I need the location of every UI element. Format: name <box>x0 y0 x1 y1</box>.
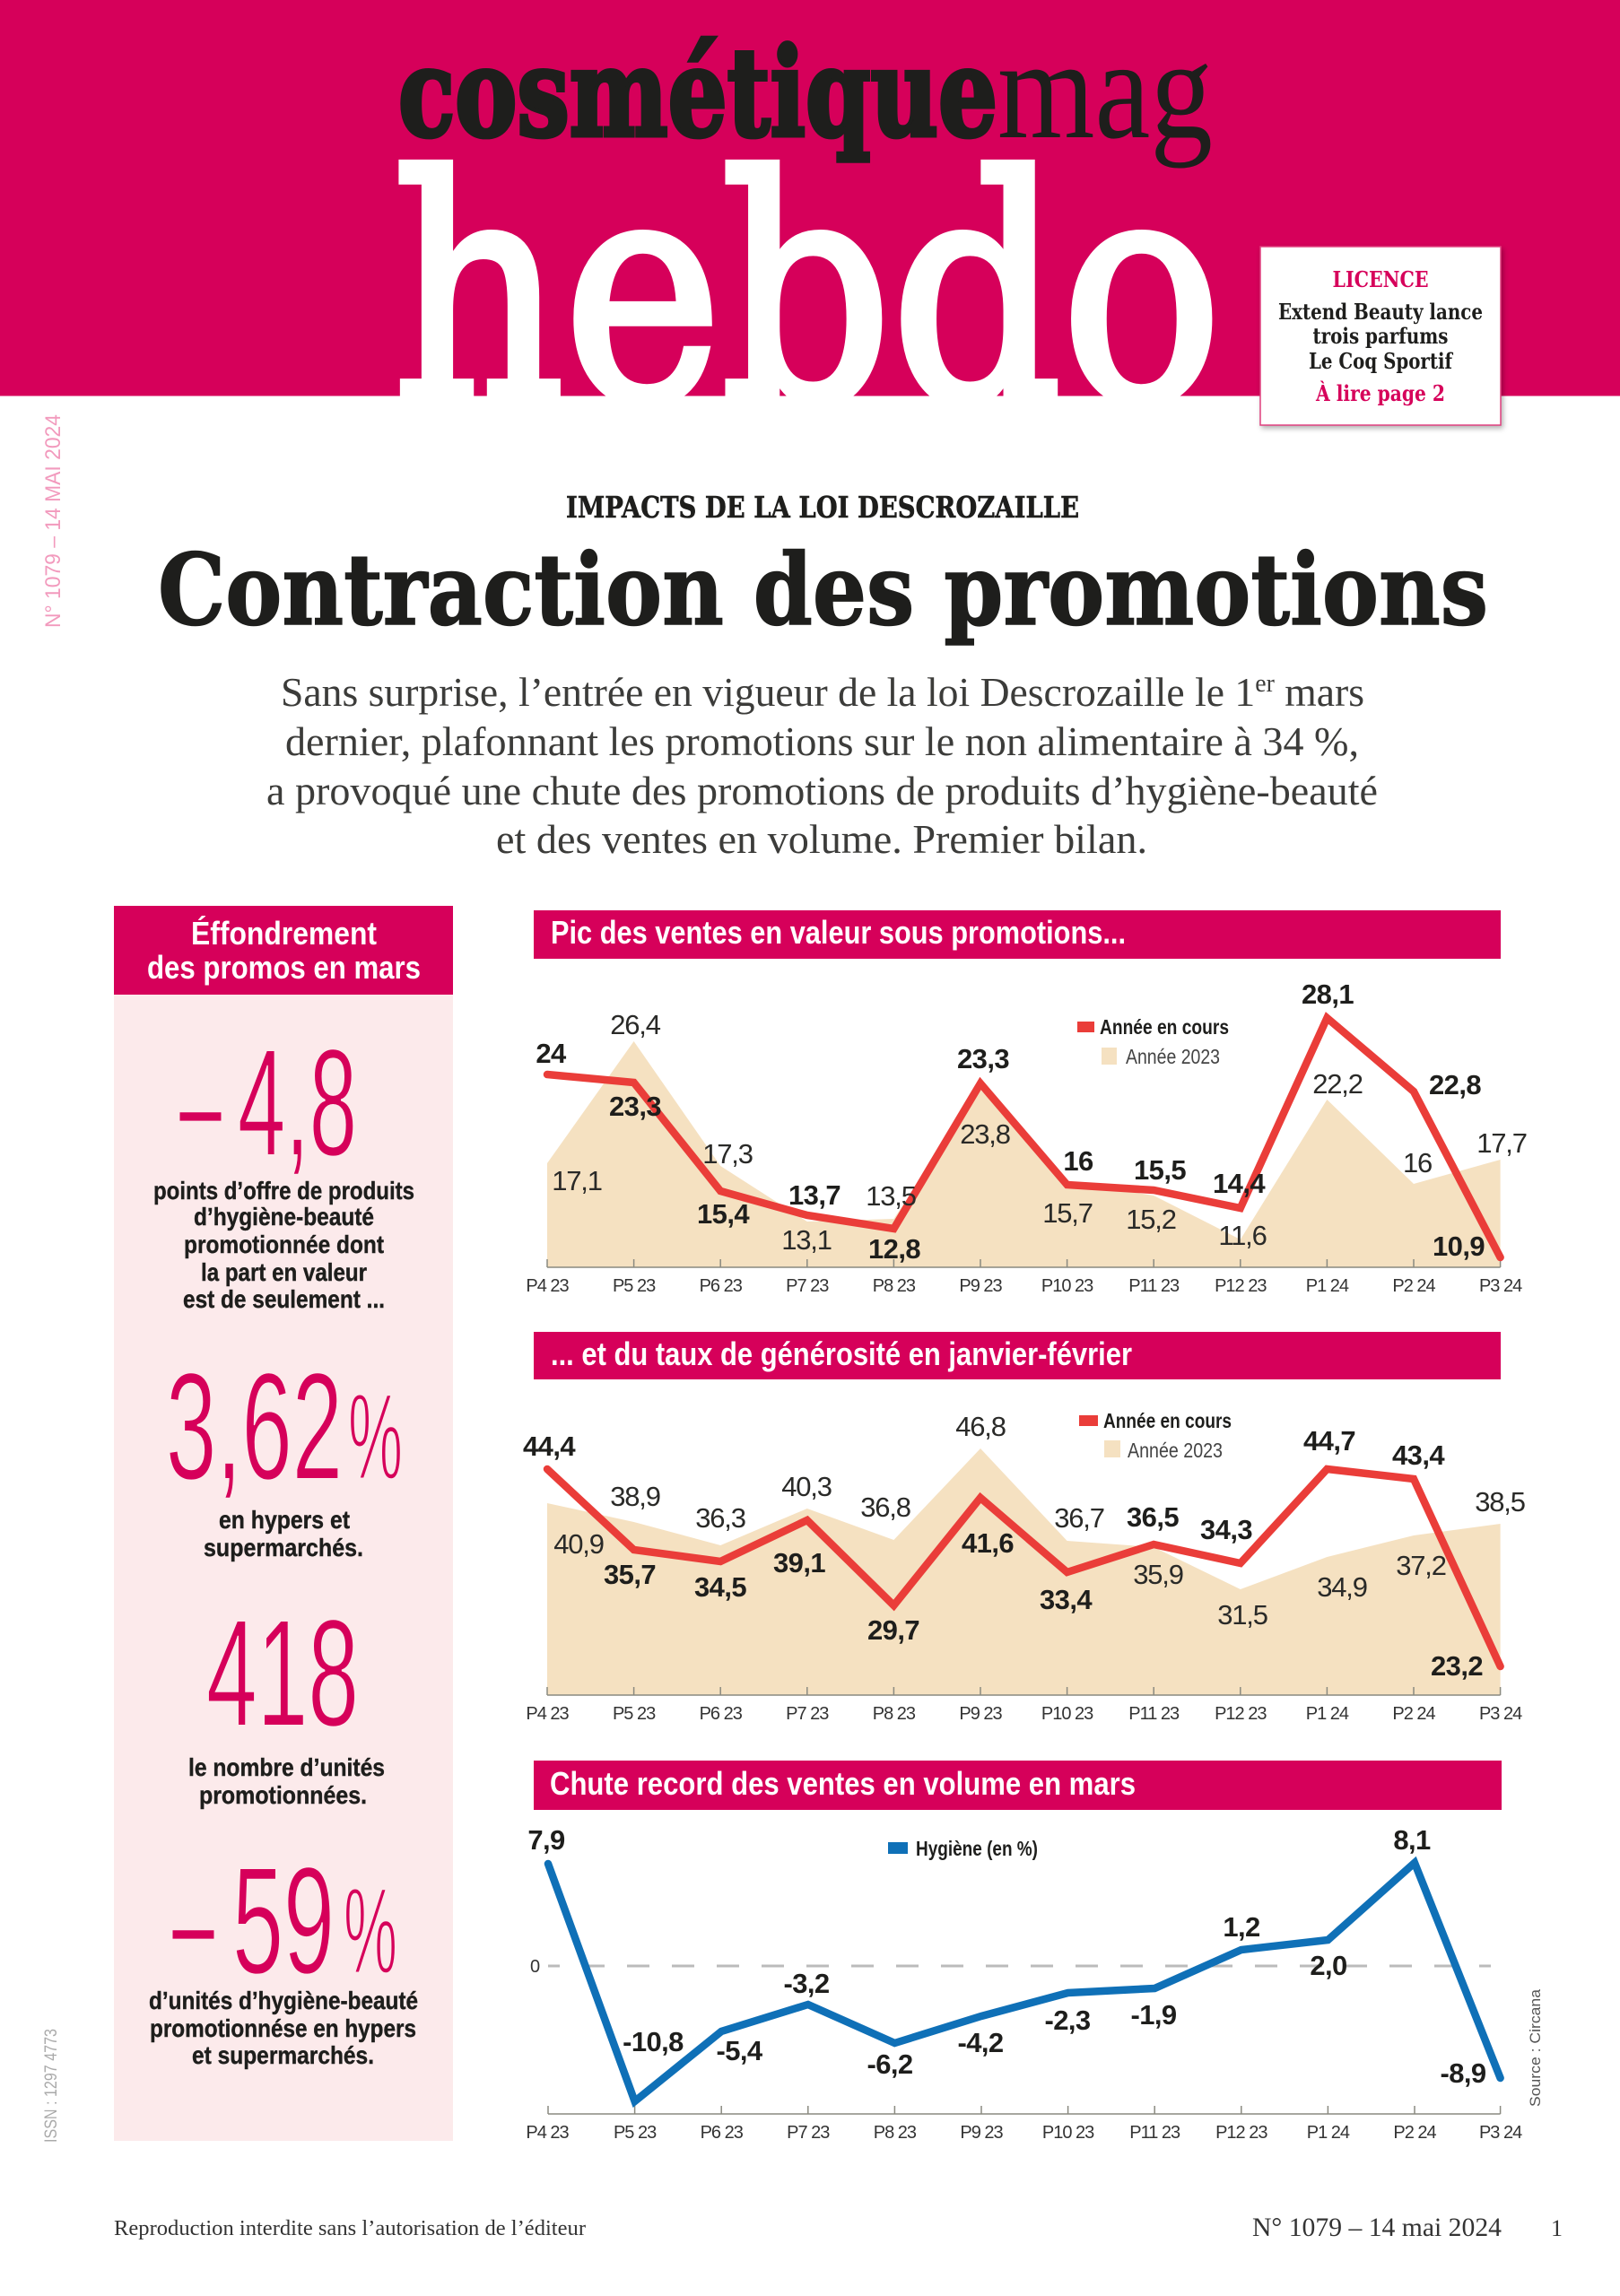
stat: -59%: % <box>344 1863 397 2000</box>
data labels: 23,8 <box>960 1118 1010 1150</box>
data labels: 2,0 <box>1310 1950 1347 1981</box>
axis labels: P2 24 <box>1392 1704 1436 1724</box>
data labels: 46,8 <box>955 1411 1006 1442</box>
axis labels: P4 23 <box>526 1276 570 1296</box>
data labels: 44,4 <box>523 1431 576 1462</box>
area: année 2023 <box>547 1448 1501 1695</box>
data labels: 34,9 <box>1317 1571 1367 1603</box>
panel heading <box>114 906 453 995</box>
data labels: 40,3 <box>781 1471 832 1502</box>
data labels: 23,3 <box>957 1043 1009 1074</box>
axis labels <box>526 1276 1522 1296</box>
axis labels: P11 23 <box>1128 1276 1180 1296</box>
data labels: 15,7 <box>1042 1197 1093 1229</box>
data labels: -8,9 <box>1440 2057 1486 2089</box>
axis labels: P3 24 <box>1479 2123 1522 2143</box>
data labels: 16 <box>1063 1145 1093 1177</box>
footer: issue and date: N° 1079 – 14 mai 2024 <box>1252 2213 1502 2242</box>
axis labels <box>526 2123 1522 2143</box>
data labels: 11,6 <box>1218 1220 1267 1251</box>
chart 1 title bar <box>534 910 1501 959</box>
data labels: 28,1 <box>1302 978 1354 1010</box>
chart 1 title bar: Pic des ventes en valeur sous promotions... <box>551 914 1126 951</box>
axis labels: P3 24 <box>1479 1276 1522 1296</box>
axis labels: P1 24 <box>1307 2123 1350 2143</box>
footer: page number: 1 <box>1551 2215 1563 2241</box>
intro paragraph <box>266 669 1378 862</box>
data labels: 15,4 <box>697 1198 750 1230</box>
data labels: -10,8 <box>623 2026 684 2057</box>
data labels: 8,1 <box>1393 1824 1431 1856</box>
data labels: 35,7 <box>604 1559 656 1590</box>
data labels: 31,5 <box>1217 1599 1267 1631</box>
data labels: 17,3 <box>702 1138 753 1170</box>
axis labels: P9 23 <box>960 2123 1004 2143</box>
axis labels: P6 23 <box>700 1704 743 1724</box>
axis labels: P10 23 <box>1041 1704 1093 1724</box>
stat: -4,8 <box>153 1018 414 1313</box>
axis labels: P5 23 <box>613 1276 656 1296</box>
chart 2 title bar <box>534 1332 1501 1379</box>
axis labels: P12 23 <box>1215 1276 1267 1296</box>
data labels: 13,1 <box>781 1224 832 1256</box>
line: année en cours <box>547 1018 1501 1257</box>
axis labels: P7 23 <box>786 1276 829 1296</box>
area: année 2023 <box>547 1041 1501 1267</box>
axis labels: P8 23 <box>873 1704 916 1724</box>
stat: -4,8: la part en valeur <box>201 1258 367 1286</box>
stat: 3,62%: % <box>348 1369 403 1506</box>
data labels: 44,7 <box>1303 1425 1355 1457</box>
logo: mag: mag <box>997 9 1213 169</box>
stat: 418: promotionnées. <box>199 1781 367 1809</box>
callout: licence teaser: À lire page 2 <box>1315 380 1445 406</box>
panel heading: Éffondrement <box>191 915 377 952</box>
stat: 3,62%: en hypers et <box>219 1506 350 1534</box>
data labels: 16 <box>1403 1147 1432 1178</box>
data labels: 35,9 <box>1133 1559 1183 1590</box>
chart 2 title bar: ... et du taux de générosité en janvier-février <box>551 1335 1132 1372</box>
axis labels: P10 23 <box>1041 1276 1093 1296</box>
stat: -59% <box>149 1836 418 2069</box>
line: année en cours <box>547 1469 1501 1666</box>
axis labels: P4 23 <box>526 1704 570 1724</box>
side note: issue number: N° 1079 – 14 MAI 2024 <box>41 414 65 628</box>
data labels: 29,7 <box>867 1614 919 1646</box>
stat: 418: le nombre d’unités <box>188 1753 385 1781</box>
stat: 3,62%: supermarchés. <box>204 1534 363 1561</box>
data labels: 23,2 <box>1431 1650 1483 1682</box>
zero label: 0 <box>530 1957 540 1977</box>
data labels: 13,5 <box>866 1180 916 1212</box>
data labels: 17,1 <box>552 1165 602 1196</box>
axis labels: P8 23 <box>874 2123 917 2143</box>
data labels: -5,4 <box>716 2035 763 2066</box>
axis labels: P7 23 <box>787 2123 830 2143</box>
data labels: 37,2 <box>1396 1550 1446 1581</box>
data labels <box>527 1824 1486 2089</box>
axis labels <box>526 1704 1522 1724</box>
data labels: 10,9 <box>1433 1231 1485 1262</box>
legend: Année 2023 <box>1126 1045 1220 1068</box>
axis labels: P6 23 <box>700 1276 743 1296</box>
legend: Année en cours <box>1103 1409 1232 1432</box>
intro paragraph: a provoqué une chute des promotions de produits d’hygiène-beauté <box>266 768 1378 813</box>
data labels: 23,3 <box>609 1091 661 1122</box>
axis labels: P12 23 <box>1215 1704 1267 1724</box>
data labels: -3,2 <box>783 1968 830 1999</box>
chart 3: ventes en volume <box>526 1761 1544 2143</box>
intro paragraph: dernier, plafonnant les promotions sur le non alimentaire à 34 %, <box>285 718 1359 764</box>
stat: -4,8: est de seulement ... <box>183 1285 385 1313</box>
axis labels: P7 23 <box>786 1704 829 1724</box>
data labels: 26,4 <box>610 1009 661 1040</box>
stat: -4,8: – <box>179 1018 222 1188</box>
data labels: 17,7 <box>1476 1127 1527 1159</box>
legend <box>888 1837 1038 1860</box>
stat: 418 <box>188 1588 385 1809</box>
data labels: 38,5 <box>1475 1486 1525 1518</box>
intro paragraph: et des ventes en volume. Premier bilan. <box>496 816 1147 862</box>
callout: licence teaser: LICENCE <box>1333 266 1428 292</box>
side note: ISSN: ISSN : 1297 4773 <box>42 2029 61 2143</box>
stat: -59%: et supermarchés. <box>192 2041 374 2069</box>
data labels: 12,8 <box>868 1233 920 1265</box>
header band with logo <box>0 0 1620 473</box>
data labels: 7,9 <box>527 1824 565 1856</box>
data labels: 14,4 <box>1213 1168 1266 1199</box>
axis labels: P8 23 <box>873 1276 916 1296</box>
axis labels: P2 24 <box>1392 1276 1436 1296</box>
axis labels: P2 24 <box>1393 2123 1437 2143</box>
data labels: 15,5 <box>1134 1154 1186 1186</box>
data labels: 22,2 <box>1312 1068 1363 1100</box>
legend <box>1077 1015 1229 1068</box>
axis labels: P1 24 <box>1306 1704 1349 1724</box>
stat: -59%: d’unités d’hygiène-beauté <box>149 1987 418 2014</box>
data labels: -6,2 <box>867 2048 913 2080</box>
data labels: 13,7 <box>788 1179 840 1211</box>
axis labels: P11 23 <box>1129 2123 1180 2143</box>
stat: 3,62%: 3,62 <box>166 1342 343 1512</box>
intro paragraph: mars <box>1275 669 1364 715</box>
panel: effondrement des promos <box>114 906 453 2141</box>
callout: licence teaser: Extend Beauty lance <box>1278 299 1483 325</box>
data labels: 24 <box>536 1038 567 1069</box>
stat: -4,8: points d’offre de produits <box>153 1177 414 1205</box>
axis labels: P5 23 <box>614 2123 657 2143</box>
data labels: 36,5 <box>1127 1501 1179 1533</box>
data labels: 40,9 <box>553 1528 604 1560</box>
intro paragraph: er <box>1255 670 1276 698</box>
axis labels: P9 23 <box>959 1276 1003 1296</box>
legend: Année en cours <box>1100 1015 1229 1039</box>
axis labels: P5 23 <box>613 1704 656 1724</box>
chart 2: taux de générosité <box>523 1332 1525 1724</box>
data labels: 39,1 <box>773 1547 825 1578</box>
legend: Année 2023 <box>1128 1439 1223 1462</box>
data labels: 41,6 <box>962 1527 1014 1559</box>
panel heading: des promos en mars <box>147 949 421 986</box>
callout: licence teaser: Le Coq Sportif <box>1309 348 1453 374</box>
stat: -59%: promotionnése en hypers <box>150 2014 416 2042</box>
axis labels: P4 23 <box>526 2123 570 2143</box>
axis labels: P6 23 <box>701 2123 744 2143</box>
chart 3 title bar <box>534 1761 1502 1810</box>
axis labels: P1 24 <box>1306 1276 1349 1296</box>
axis labels: P11 23 <box>1128 1704 1180 1724</box>
axis labels: P12 23 <box>1215 2123 1267 2143</box>
intro paragraph: Sans surprise, l’entrée en vigueur de la loi Descrozaille le 1 <box>281 669 1263 715</box>
data labels: 34,5 <box>694 1571 746 1603</box>
data labels: -2,3 <box>1044 2005 1091 2036</box>
callout: licence teaser <box>1260 247 1501 425</box>
stat: -4,8: promotionnée dont <box>184 1231 384 1258</box>
data labels: -4,2 <box>957 2027 1004 2058</box>
logo: cosmétique: cosmétique <box>398 22 997 165</box>
source note: Source : Circana <box>1527 1988 1544 2107</box>
axis labels: P3 24 <box>1479 1704 1522 1724</box>
data labels: 36,8 <box>860 1492 910 1523</box>
line: hygiène <box>548 1863 1501 2101</box>
data labels: -1,9 <box>1130 1999 1177 2031</box>
data labels: 15,2 <box>1126 1204 1176 1235</box>
stat: -4,8: d’hygiène-beauté <box>194 1203 374 1231</box>
data labels: 43,4 <box>1392 1439 1445 1471</box>
data labels: 36,3 <box>695 1502 745 1534</box>
stat: -59%: – <box>172 1836 214 2006</box>
stat: -59%: 59 <box>232 1836 335 2006</box>
data labels <box>536 978 1527 1265</box>
footer: reproduction notice: Reproduction interdite sans l’autorisation de l’éditeur <box>114 2217 586 2240</box>
data labels: 34,3 <box>1200 1514 1252 1545</box>
legend: Hygiène (en %) <box>916 1837 1038 1860</box>
data labels: 38,9 <box>610 1481 660 1512</box>
callout: licence teaser: trois parfums <box>1313 323 1448 349</box>
data labels: 36,7 <box>1054 1502 1104 1534</box>
axis labels: P9 23 <box>959 1704 1003 1724</box>
stat: 3,62% <box>166 1342 403 1561</box>
chart 3 title bar: Chute record des ventes en volume en mars <box>550 1765 1136 1802</box>
kicker: IMPACTS DE LA LOI DESCROZAILLE <box>566 490 1079 525</box>
data labels: 1,2 <box>1223 1911 1260 1943</box>
data labels <box>523 1411 1525 1682</box>
chart 1: ventes en valeur sous promotions <box>526 910 1527 1296</box>
stat: 418: 418 <box>206 1588 359 1759</box>
legend <box>1079 1409 1232 1462</box>
axis labels: P10 23 <box>1042 2123 1094 2143</box>
logo: hebdo: hebdo <box>393 113 1222 473</box>
stat: -4,8: 4,8 <box>238 1018 357 1188</box>
data labels: 33,4 <box>1040 1584 1093 1615</box>
data labels: 22,8 <box>1429 1069 1481 1100</box>
